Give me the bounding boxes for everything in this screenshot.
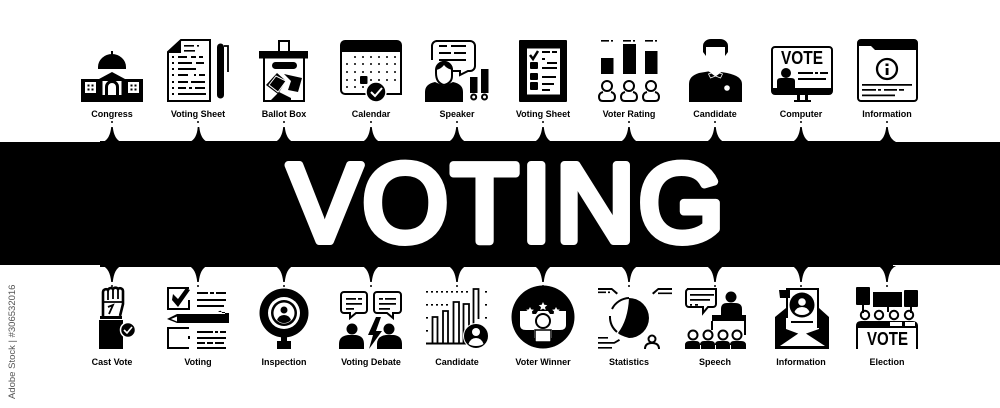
icon: election protest: VOTE [867,329,908,349]
icon: inspection magnifier [260,288,308,349]
icon: information folder [858,40,917,101]
icon: congress [81,51,143,102]
label: Statistics: Statistics [609,357,649,367]
icon: speaker [425,41,488,102]
icon: candidate [689,39,742,102]
label: Congress: Congress [91,109,133,119]
label: Voter Winner: Voter Winner [515,357,571,367]
label: Speaker: Speaker [439,109,475,119]
icon: voting debate [339,292,402,349]
icon: voting sheet clipboard [519,40,567,102]
label: Information: Information [862,109,912,119]
label: Inspection: Inspection [261,357,307,367]
title: VOTING [288,142,724,265]
label: Speech: Speech [699,357,731,367]
icon: election protest [856,287,918,349]
icon: speech audience [685,289,746,349]
icon: information envelope [775,289,829,349]
label: Information: Information [776,357,826,367]
label: Election: Election [869,357,905,367]
label: Voting Sheet: Voting Sheet [516,109,570,119]
icon: candidate chart [426,289,488,348]
label: Voting Debate: Voting Debate [341,357,401,367]
label: Voter Rating: Voter Rating [603,109,655,119]
label: Candidate: Candidate [435,357,479,367]
label: Voting: Voting [184,357,212,367]
icon: computer vote [771,47,833,102]
icon: voting checklist and pencil [167,288,229,349]
label: Calendar: Calendar [352,109,391,119]
label: Ballot Box: Ballot Box [262,109,306,119]
icon: voter rating [599,40,659,101]
label: Candidate: Candidate [693,109,737,119]
icon: statistics pie [598,288,672,349]
icon: voter winner [512,286,574,348]
black title band with connectors [0,121,1000,287]
icon: cast vote fist [99,288,136,349]
label: Voting Sheet: Voting Sheet [171,109,225,119]
icon: calendar [340,40,402,102]
icon: ballot box [259,41,308,101]
icon: voting sheet with pen [167,39,228,101]
icon: computer vote: VOTE [781,48,823,68]
label: Cast Vote: Cast Vote [92,357,132,367]
label: Computer: Computer [780,109,823,119]
side credit text: Adobe Stock | #306532016 [7,285,18,399]
